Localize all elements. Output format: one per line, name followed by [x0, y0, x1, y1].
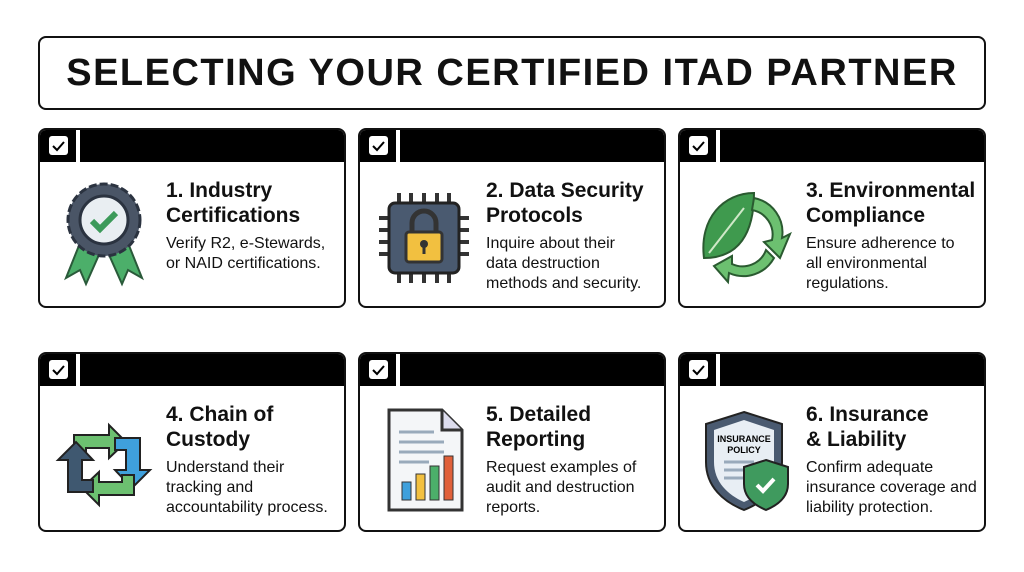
icon: award ribbon: [64, 182, 144, 286]
panel: chain of custody: Understand their: [166, 459, 284, 476]
panel: chain of custody: Custody: [166, 428, 250, 451]
panel: industry certifications: [38, 128, 346, 308]
panel: environmental: all environmental: [806, 255, 927, 272]
panel: reporting: audit and destruction: [486, 479, 635, 496]
icon: insurance shield: POLICY: [727, 445, 761, 455]
panel: insurance: [678, 352, 986, 532]
panel: reporting: reports.: [486, 499, 540, 516]
panel: insurance: & Liability: [806, 428, 906, 451]
panel: environmental: Ensure adherence to: [806, 235, 955, 252]
panel: environmental: Compliance: [806, 204, 925, 227]
panel: chain of custody: 4. Chain of: [166, 403, 273, 426]
panel: reporting: Request examples of: [486, 459, 636, 476]
panel: chain of custody: accountability process.: [166, 499, 328, 516]
panel: industry certifications: Certifications: [166, 204, 300, 227]
icon: cycle arrows: [56, 422, 152, 508]
panel: data security: 2. Data Security: [486, 179, 644, 202]
panel: data security: [358, 128, 666, 308]
title: [38, 36, 986, 110]
panel: data security: Inquire about their: [486, 235, 615, 252]
icon: report document: [388, 408, 464, 512]
panel: chain of custody: [38, 352, 346, 532]
panel: data security: Protocols: [486, 204, 583, 227]
panel: chain of custody: tracking and: [166, 479, 253, 496]
panel: insurance: liability protection.: [806, 499, 933, 516]
panel: industry certifications: or NAID certifications.: [166, 255, 321, 272]
panel: industry certifications: Verify R2, e-Stewards,: [166, 235, 325, 252]
panel: environmental: [678, 128, 986, 308]
icon: insurance shield: [705, 411, 789, 512]
icon: insurance shield: INSURANCE: [717, 434, 771, 444]
panel: reporting: [358, 352, 666, 532]
icon: chip with padlock: [379, 193, 469, 283]
title: SELECTING YOUR CERTIFIED ITAD PARTNER: [66, 52, 958, 94]
panel: industry certifications: 1. Industry: [166, 179, 272, 202]
panel: data security: methods and security.: [486, 275, 641, 292]
panel: reporting: 5. Detailed: [486, 403, 591, 426]
panel: insurance: Confirm adequate: [806, 459, 933, 476]
panel: reporting: Reporting: [486, 428, 585, 451]
panel: environmental: 3. Environmental: [806, 179, 975, 202]
icon: recycle leaf: [702, 192, 792, 284]
panel: environmental: regulations.: [806, 275, 889, 292]
panel: insurance: 6. Insurance: [806, 403, 929, 426]
panel: insurance: insurance coverage and: [806, 479, 977, 496]
panel: data security: data destruction: [486, 255, 600, 272]
